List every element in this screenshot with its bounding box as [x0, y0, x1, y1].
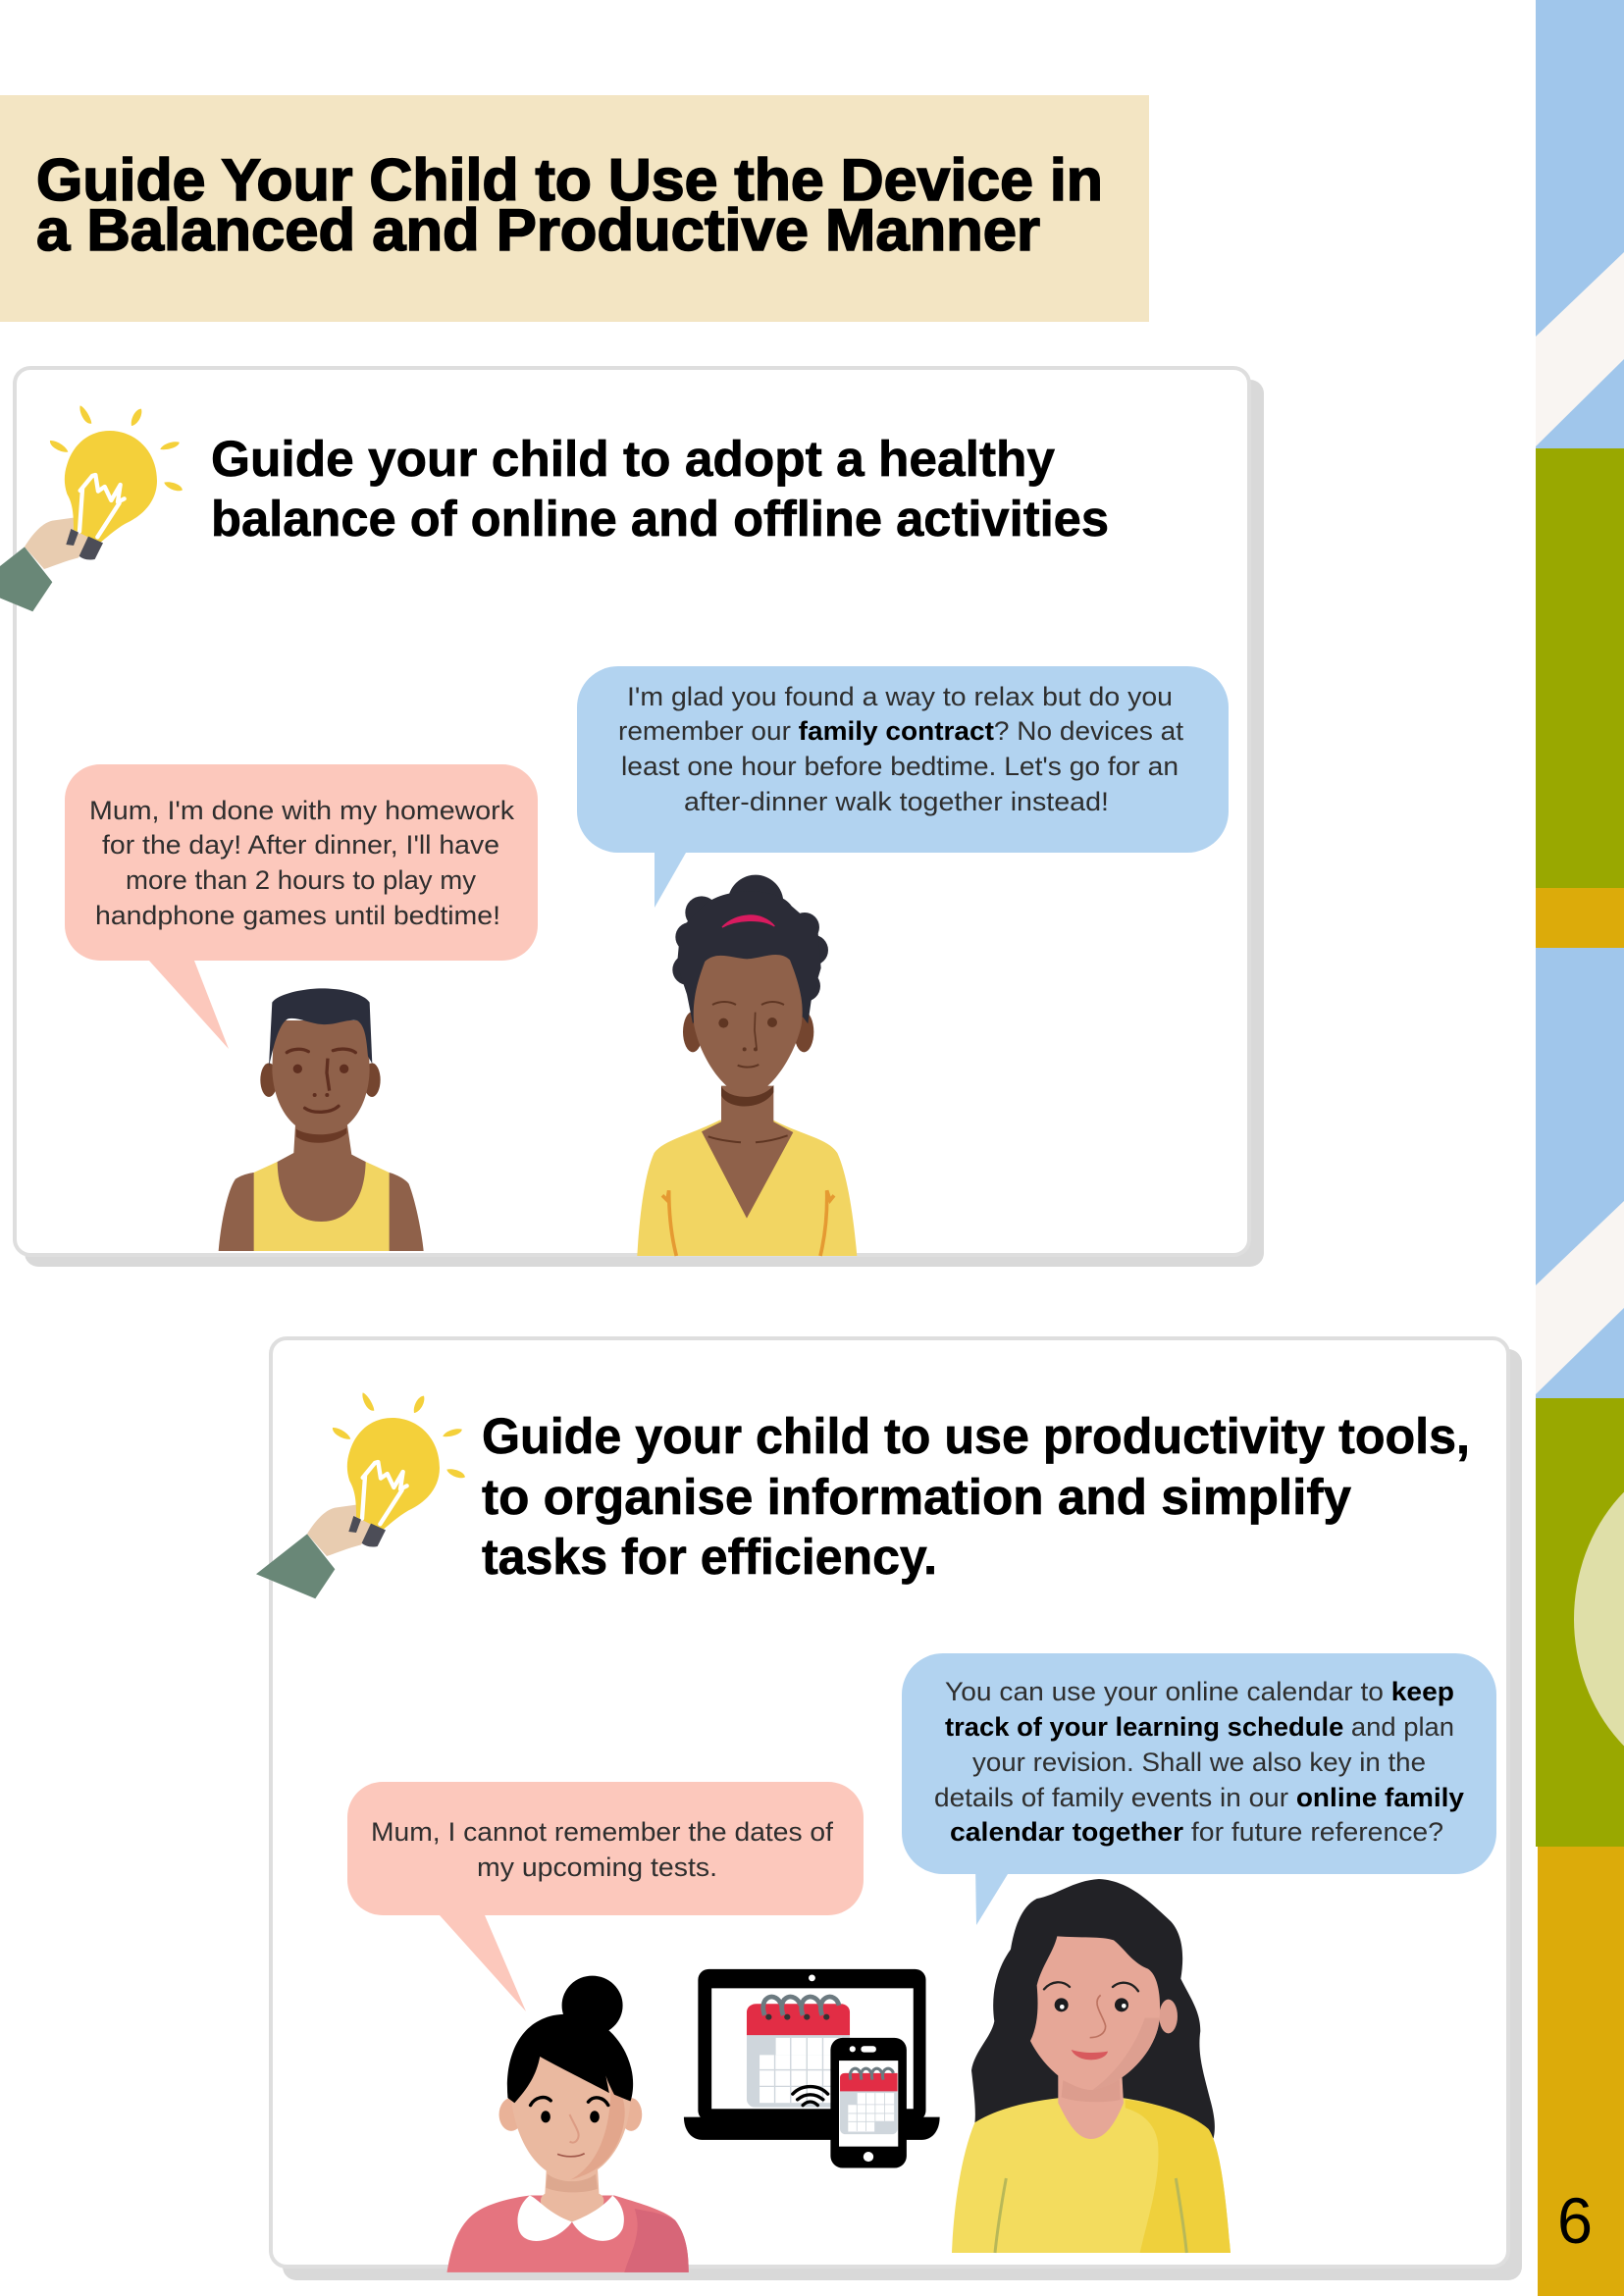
- illustration: boy: [219, 988, 424, 1251]
- speech bubble: mother: I'm glad you found a way to relax but do you: [627, 682, 1173, 711]
- heading: Guide your child to adopt a healthy: [211, 431, 1056, 487]
- illustration: mother with curly hair: [637, 875, 857, 1256]
- panel card 2: [271, 1338, 1522, 2280]
- decorative colour strip: right side: [1536, 0, 1624, 2296]
- panel: healthy balance of online and offline activities: [0, 368, 1264, 1267]
- speech bubble: child: more than 2 hours to play my: [126, 865, 477, 895]
- panel: productivity tools: [256, 1338, 1522, 2280]
- title: a Balanced and Productive Manner: [36, 197, 1040, 263]
- illustration: girl with hair bun: [446, 1976, 689, 2272]
- speech bubble: child: Mum, I'm done with my homework: [89, 796, 515, 825]
- calendar on laptop screen: [747, 1997, 850, 2108]
- speech bubble: child: my upcoming tests.: [477, 1852, 717, 1882]
- panel card 1: [15, 368, 1264, 1267]
- speech bubble: mother: details of family events in our online family: [934, 1783, 1464, 1812]
- speech bubble: child: [65, 764, 538, 1049]
- icon: smartphone with calendar: [830, 2038, 907, 2168]
- speech bubble: child: handphone games until bedtime!: [95, 901, 500, 930]
- speech bubble: mother: after-dinner walk together instead!: [684, 787, 1109, 816]
- icon: hand holding light bulb: [0, 405, 183, 611]
- heading: balance of online and offline activities: [211, 491, 1109, 547]
- illustration: mother with long wavy hair: [952, 1879, 1231, 2253]
- heading: Guide your child to use productivity tools,: [482, 1408, 1470, 1464]
- speech bubble: mother: track of your learning schedule and plan: [945, 1712, 1454, 1742]
- speech bubble: child: Mum, I cannot remember the dates of: [371, 1817, 834, 1847]
- speech bubble: mother: [902, 1653, 1496, 1925]
- title: Guide Your Child to Use the Device in: [36, 147, 1103, 213]
- speech bubble: mother: calendar together for future reference?: [950, 1817, 1443, 1847]
- speech bubble: mother: You can use your online calendar to keep: [945, 1677, 1454, 1706]
- icon: hand holding light bulb: [256, 1392, 465, 1598]
- speech bubble: child: for the day! After dinner, I'll have: [102, 830, 499, 860]
- icon: laptop with calendar and wifi: [684, 1969, 940, 2140]
- title banner: [0, 95, 1149, 322]
- speech bubble: child: [347, 1782, 864, 2011]
- wifi symbol: [793, 2087, 828, 2106]
- heading: tasks for efficiency.: [482, 1529, 937, 1585]
- speech bubble: mother: least one hour before bedtime. Let's go for an: [621, 752, 1179, 781]
- speech bubble: mother: your revision. Shall we also key in the: [972, 1748, 1426, 1777]
- heading: to organise information and simplify: [482, 1469, 1352, 1525]
- speech bubble: mother: [577, 666, 1229, 908]
- page number: 6: [1557, 2184, 1593, 2257]
- speech bubble: mother: remember our family contract ? No devices at: [618, 716, 1184, 746]
